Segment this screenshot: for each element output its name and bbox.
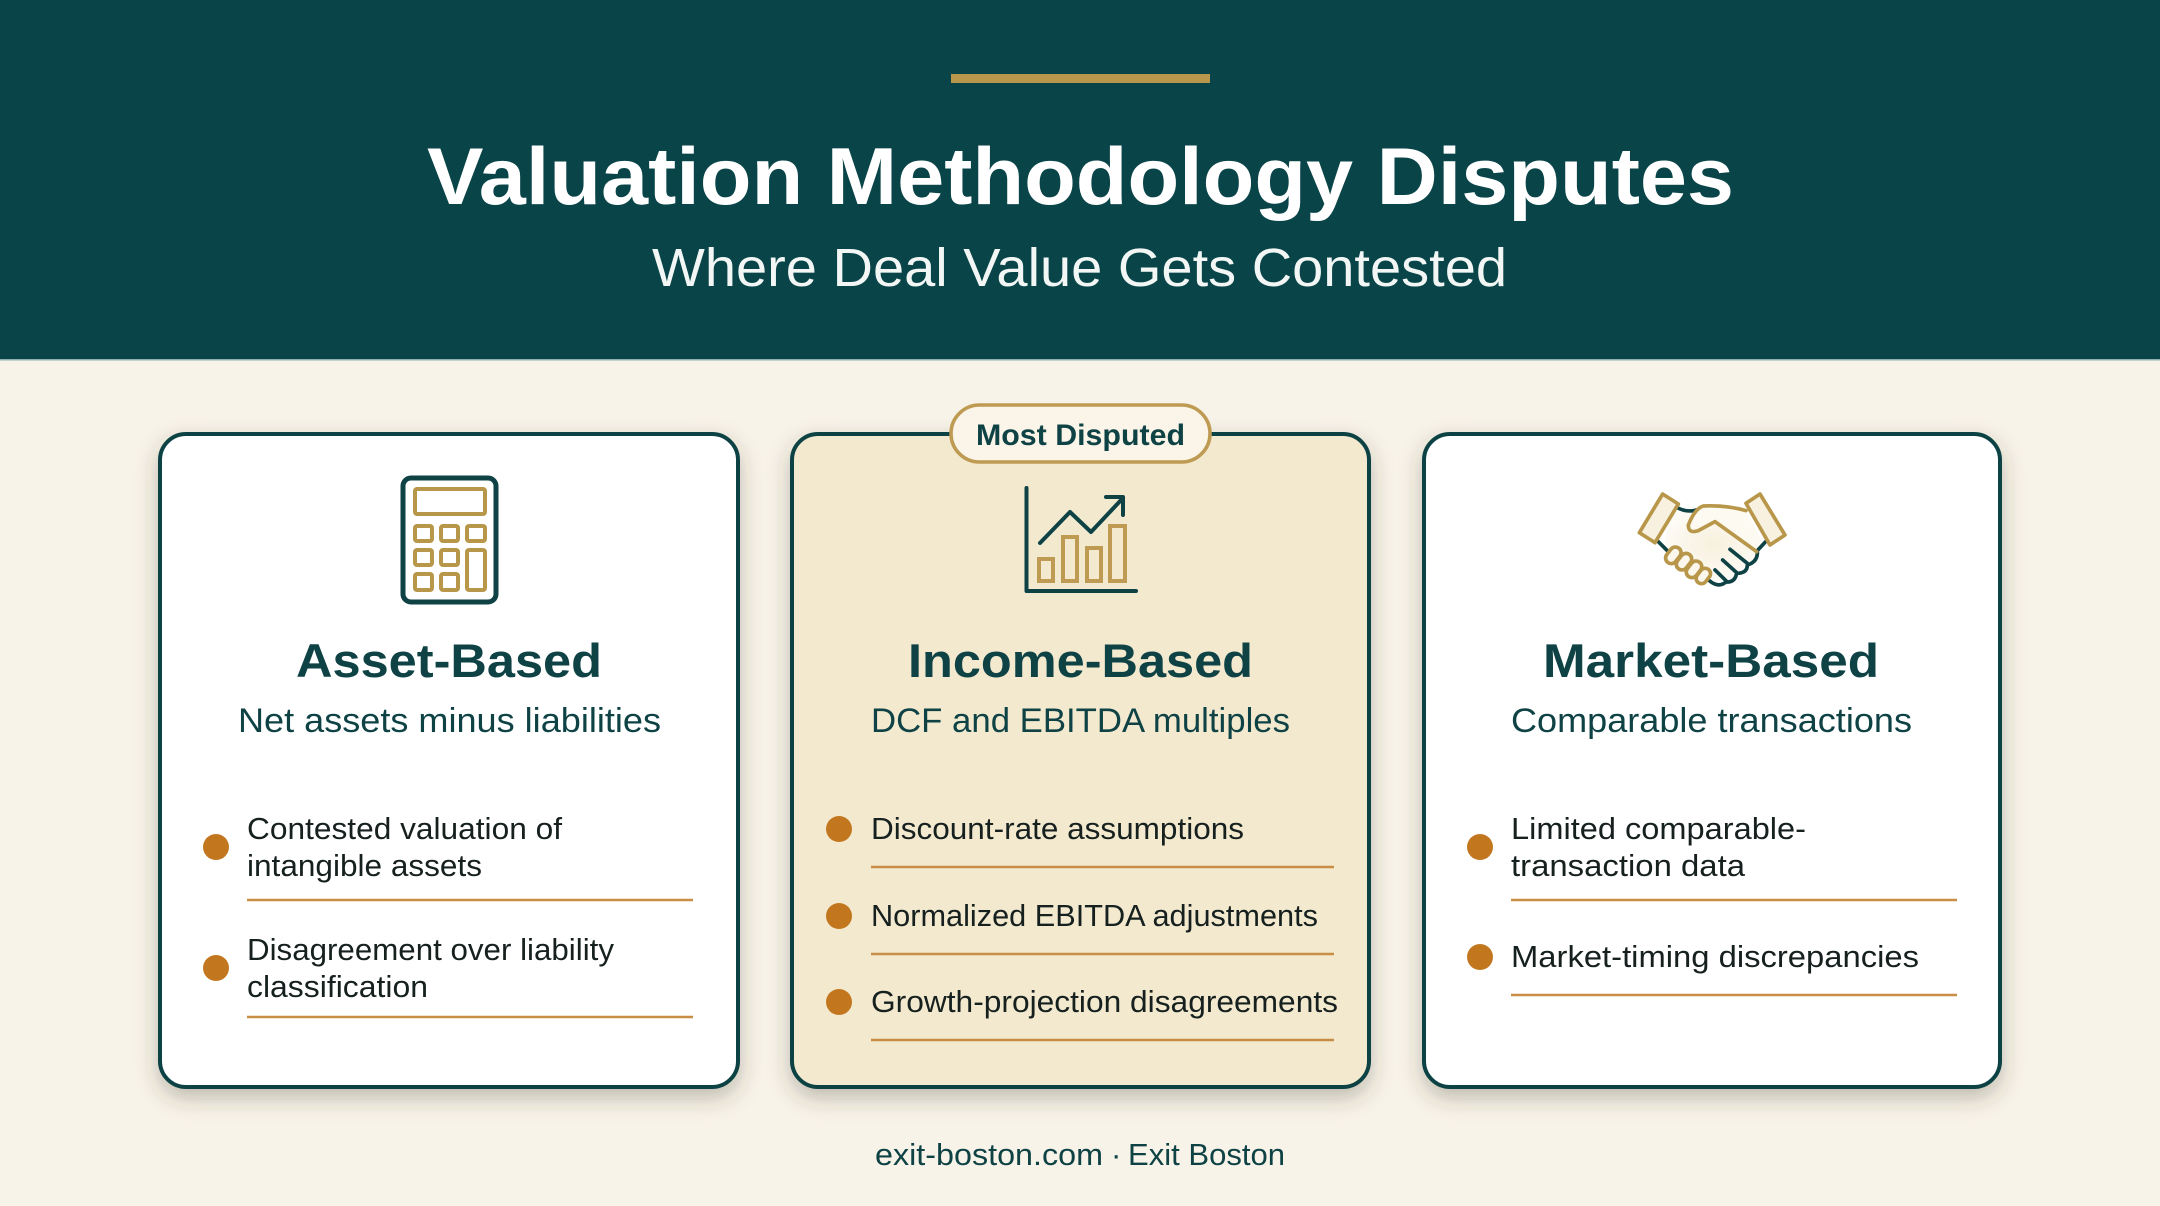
panel: asset-based [160,434,738,1087]
badge: most disputed: Most Disputed [976,419,1185,452]
footer: Exit Boston [1128,1137,1285,1172]
header banner [0,0,2160,360]
icon: calculator [403,478,496,602]
panel: income-based [792,405,1369,1087]
icon: growth chart [1026,488,1136,591]
icon: handshake [1639,494,1785,586]
bullet: intangible assets [203,811,693,900]
subtitle: Where Deal Value Gets Contested [652,238,1507,298]
footer [875,1137,1285,1172]
bullet: limited comparable data [1467,811,1957,900]
footer: · [1111,1137,1121,1172]
bullet: intangible assets: intangible assets [247,848,482,883]
bullet: limited comparable data: Limited comparable- [1511,811,1806,846]
badge: most disputed [951,405,1210,462]
description: asset-based: Net assets minus liabilities [238,702,661,740]
bullet: market timing: Market-timing discrepancies [1511,939,1919,974]
heading: market-based: Market-Based [1543,634,1879,687]
bullet: liability classification: Disagreement over liability [247,932,614,967]
panel: market-based [1424,434,2000,1087]
bullet: liability classification: classification [247,969,428,1004]
bullet: liability classification [203,932,693,1017]
bullet: ebitda adjustments: Normalized EBITDA adjustments [871,898,1318,933]
title: Valuation Methodology Disputes [427,132,1734,222]
bullet: intangible assets: Contested valuation of [247,811,562,846]
bullet: growth projection [826,984,1338,1040]
bullet: market timing [1467,939,1957,995]
bullet: discount rate [826,811,1334,867]
description: income-based: DCF and EBITDA multiples [871,702,1290,740]
description: market-based: Comparable transactions [1511,702,1912,740]
footer: exit-boston.com [875,1137,1103,1172]
bullet: limited comparable data: transaction data [1511,848,1746,883]
heading: income-based: Income-Based [908,634,1253,687]
bullet: ebitda adjustments [826,898,1334,954]
bullet: discount rate: Discount-rate assumptions [871,811,1244,846]
accent bar [951,74,1210,83]
bullet: growth projection: Growth-projection disagreements [871,984,1338,1019]
heading: asset-based: Asset-Based [296,634,602,687]
